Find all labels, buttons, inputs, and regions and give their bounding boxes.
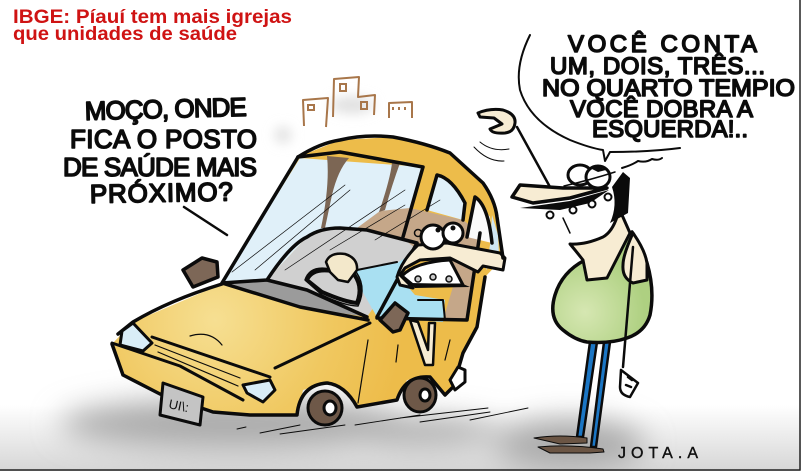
motion marks [474,142,509,161]
speech bubble text: driver: MOÇO, ONDE [84,92,247,126]
window pillars [321,156,400,228]
interior grey [267,228,417,317]
speech bubble text: driver: FICA O POSTO [70,124,257,154]
speech bubble text: pedestrian: NO QUARTO TEMPIO [542,75,795,102]
motion lines [237,408,528,434]
window frames [222,152,492,320]
side windows [427,175,465,220]
pedestrian [474,109,662,453]
shoes [534,436,604,453]
driver shirt [350,250,445,322]
hanging hand [620,370,638,397]
title: IBGE: Píauí tem mais igrejas [13,7,292,28]
driver hand [326,254,357,282]
chin [563,218,570,233]
sleeve [623,233,647,283]
body outline [112,136,503,415]
collar and neck [570,215,630,280]
car body [112,137,503,415]
speech bubble text: pedestrian: VOCÊ DOBRA A [570,96,753,123]
tail light [450,367,465,390]
headlights [120,323,152,351]
speech bubble text: pedestrian [542,31,795,143]
cap visor [512,185,607,203]
hood lines [112,323,370,400]
black mouth [610,172,630,223]
legs [577,342,610,447]
speech bubble text: driver: PRÓXIMO? [90,177,233,209]
licence plate [160,383,203,425]
rear seat [357,208,480,320]
dashboard [222,280,367,317]
speech bubble text: pedestrian: VOCÊ CONTA [568,31,757,58]
icon: distant buildings [303,77,412,127]
speech bubble text: pedestrian: UM, DOIS, TRÊS... [550,53,765,80]
licence plate: UI\: [167,396,190,415]
speech bubble text: pedestrian: ESQUERDA!.. [592,116,748,143]
teeth [546,194,612,218]
hair [622,158,662,168]
windshield [222,158,423,283]
wheels [308,391,342,425]
windshield reflections [232,185,440,272]
hat band [564,172,615,186]
pointing arm [517,127,550,187]
title: que unidades de saúde [13,24,237,45]
speech bubble outline: pedestrian [519,35,680,161]
pointing hand [478,109,515,133]
car [112,136,528,434]
speech tail: driver [184,207,227,235]
signature: JOTA.A [618,445,698,462]
eyes [568,165,610,188]
steering wheel [307,270,360,303]
background smudges [275,97,374,143]
title [13,7,292,45]
belly [553,232,652,342]
side mirrors [183,258,218,287]
ground shadow [0,398,801,471]
driver forearm on door [410,320,435,365]
hanging arm [623,247,633,367]
speech bubble text: driver: DE SAÚDE MAIS [63,152,257,182]
driver face [397,223,505,288]
speech bubble text: driver [63,92,257,209]
